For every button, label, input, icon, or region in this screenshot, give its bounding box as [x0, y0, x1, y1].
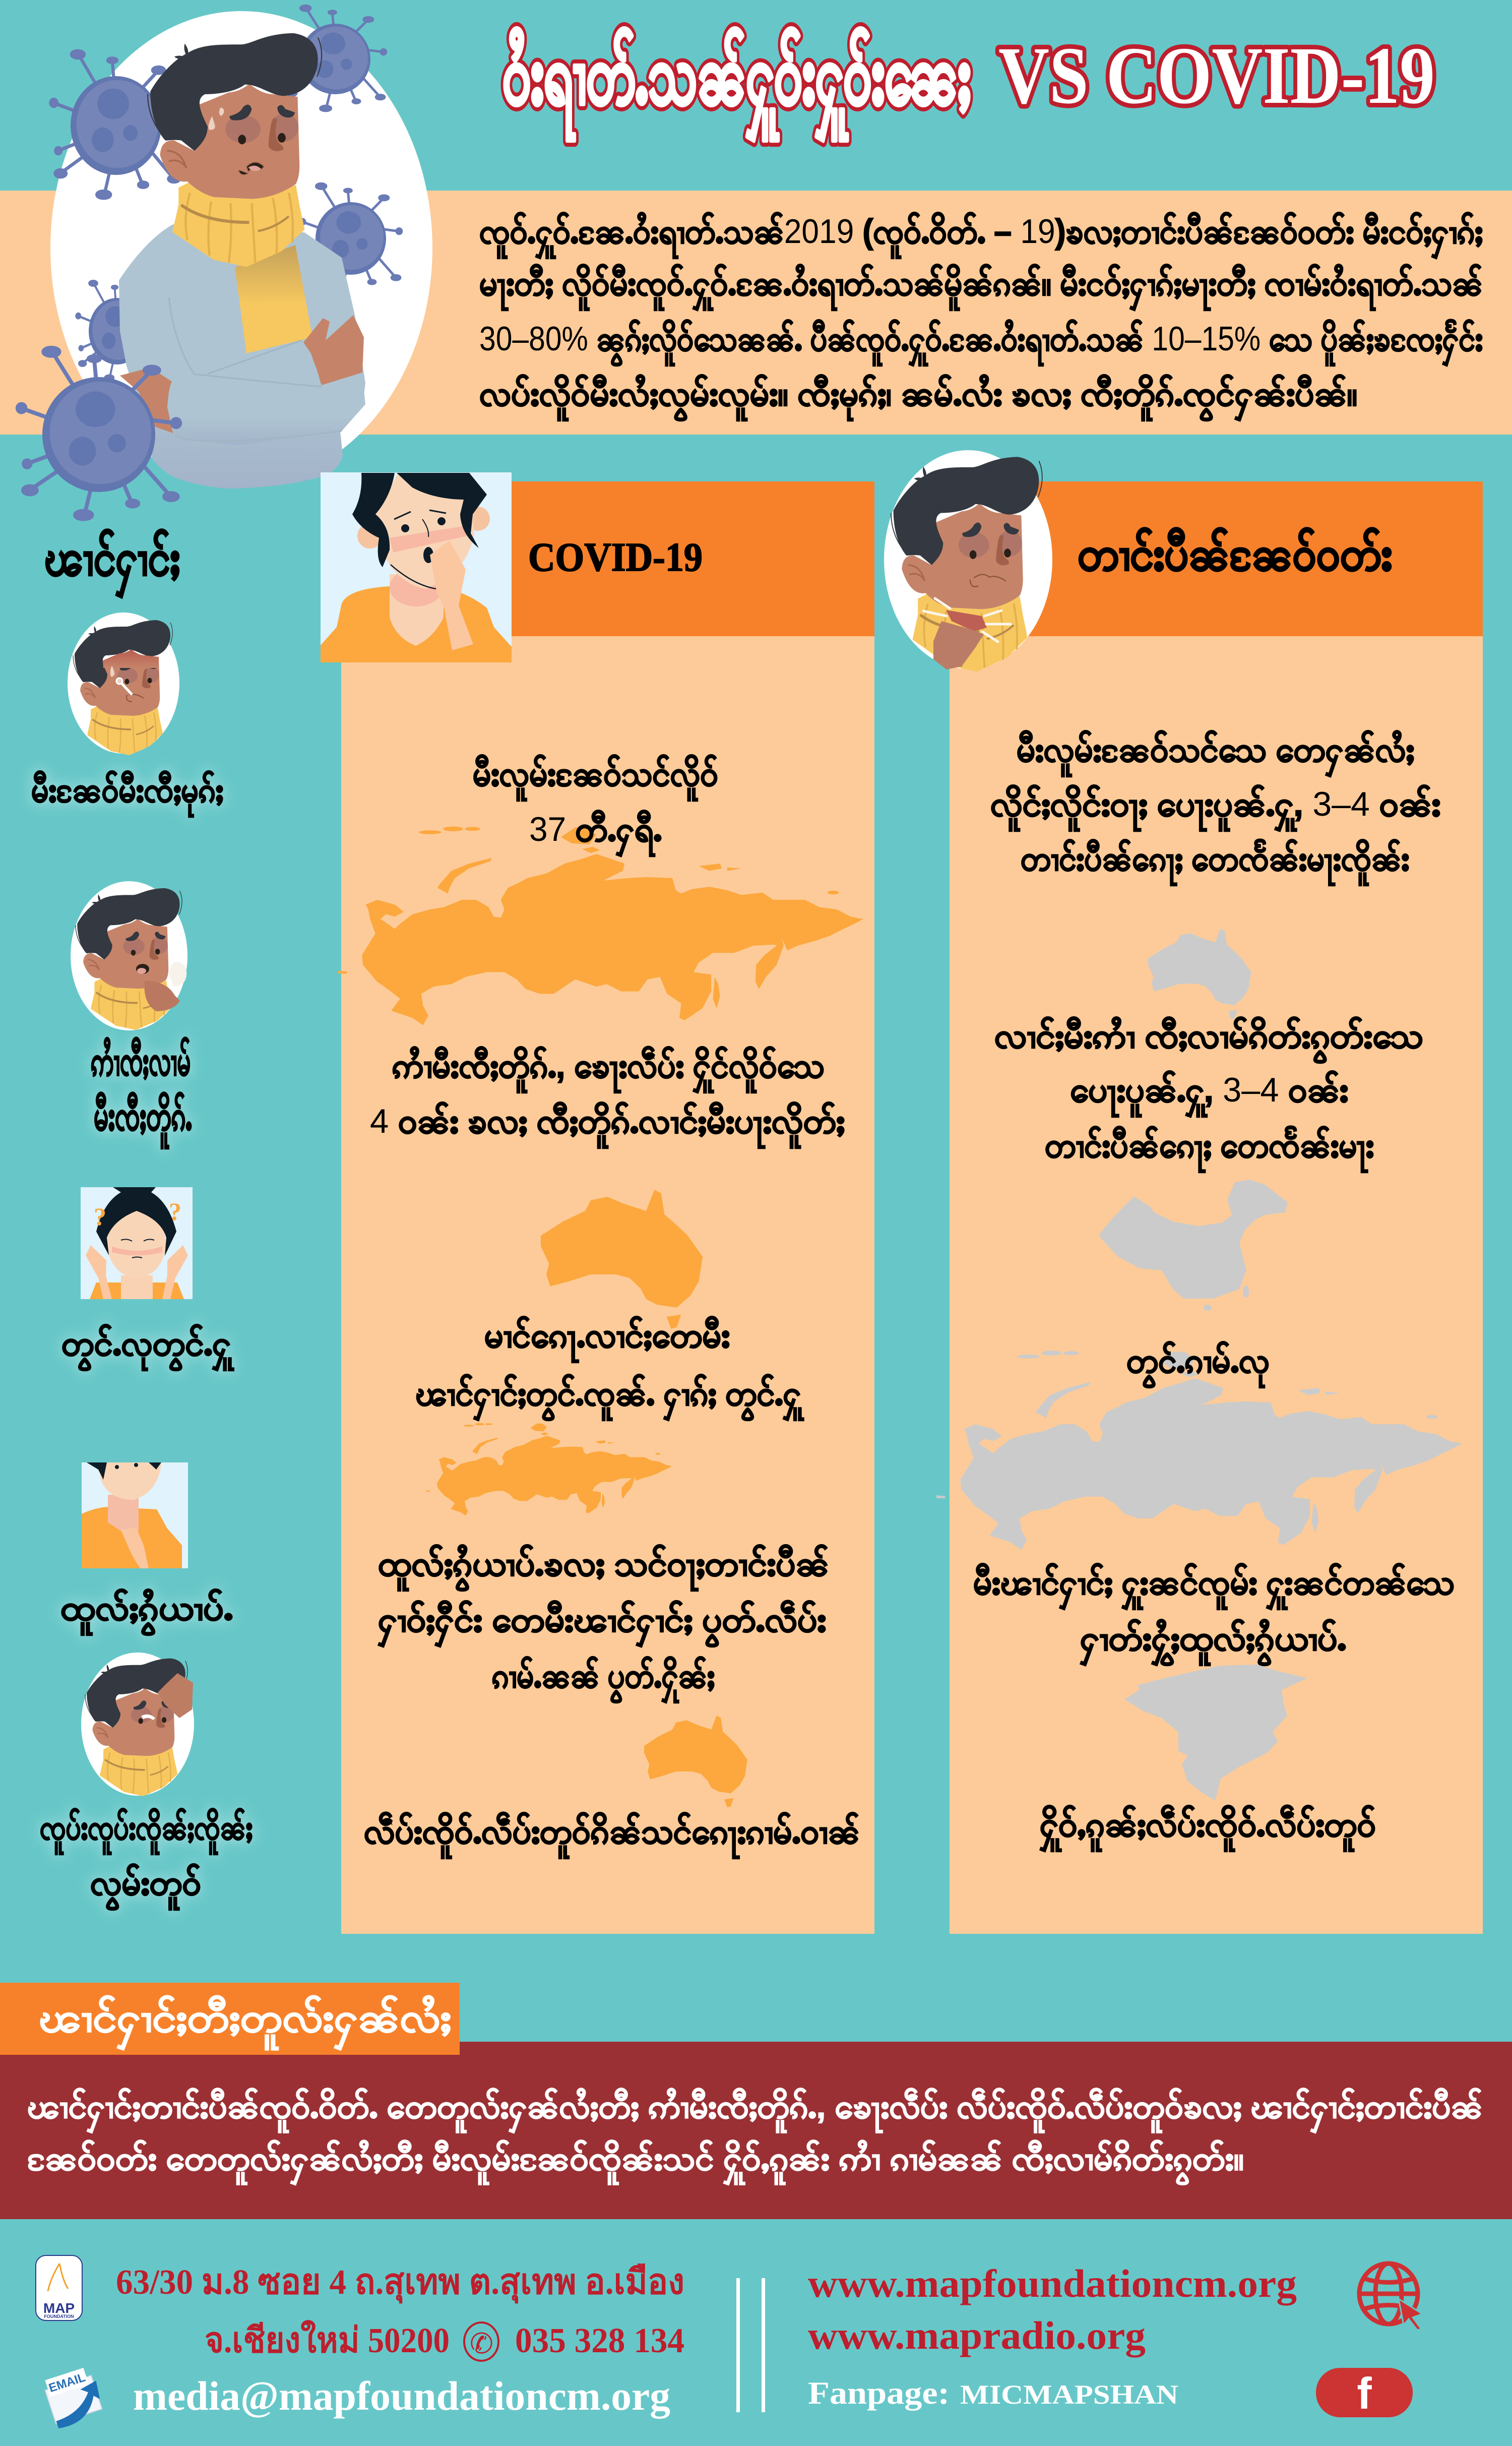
symptom: loss of smell: တွင်ႉလုတွင်ႉႁူ [61, 1324, 234, 1371]
footer: MAP logo [36, 2255, 82, 2320]
map: Russia [338, 826, 863, 1025]
intro text: 30–80% ၼွၵ်ႈလိူဝ်သေၼၼ်ႉ ပီၼ်ၸူဝ်ႉႁူဝ်ႉၼႄႉဝႆးရၢတ်ႉသၼ် 10–15% သေ ပိူၼ်ႈၶၸႄႈႁႅင်း [479, 319, 1483, 366]
footer: address [116, 2263, 684, 2361]
cough text: ပေႃးပူၼ်ႉႁူ, 3–4 ဝၼ်း [1070, 1070, 1348, 1118]
symptom: loss of smell: ? [94, 1202, 106, 1231]
panel: flu [884, 450, 1483, 1934]
icon: email: EMAIL [47, 2370, 87, 2395]
symptom: dry cough: ဢၢႆၸီႈလၢမ် [91, 1037, 191, 1084]
smell text: ၽၢင်ႁၢင်ႈတွင်ႉၸူၼ်ႉ ႁၢၵ်ႈ တွင်ႉႁူ [415, 1374, 804, 1421]
illustration: man with sore throat [884, 450, 1052, 671]
map: Russia small [426, 1423, 672, 1516]
cough text: ဢၢႆမီးၸီႈတိူၵ်ႉ, ၶေႃးလဵပ်း ႁိူင်လိူဝ်သေ [392, 1046, 825, 1093]
icon: globe cursor [1359, 2264, 1422, 2330]
title [502, 28, 1435, 141]
intro text [479, 212, 1483, 421]
fever text: တၢင်းပီၼ်ၵေႃႈ တေၸႅၼ်းမႃးၸိူၼ်း [1021, 838, 1409, 886]
footer: address: จ.เชียงใหม่ 50200 [205, 2319, 450, 2360]
illustration: sick man with viruses [18, 6, 432, 519]
panel: common symptoms [0, 1983, 1512, 2219]
COVID-19 heading: COVID-19 [528, 535, 703, 580]
body ache text: ႁိူဝ်ႇၵူၼ်ႈလဵပ်းၸိူဝ်ႉလဵပ်းတူဝ် [1040, 1805, 1376, 1852]
smell text: တွင်ႉၵၢမ်ႉလု [1126, 1341, 1270, 1388]
cough text: လၢင်ႈမီးဢၢႆ ၸီႈလၢမ်ၵိတ်းၵွတ်းသေ [994, 1016, 1423, 1064]
throat text: ထူလ်ႈၵွႆယၢပ်ႉၶလႈ သင်ဝႃႈတၢင်းပီၼ် [378, 1544, 829, 1592]
symptom: loss of smell: ? [169, 1197, 181, 1226]
throat text: ႁၢဝ်ႈႁီင်း တေမီးၽၢင်ႁၢင်ႈ ပွတ်ႉလဵပ်း [378, 1600, 826, 1647]
smell text: မၢင်ၵေႃႉလၢင်ႈတေမီး [484, 1316, 730, 1363]
cough text: 4 ဝၼ်း ၶလႈ ၸီႈတိူၵ်ႉလၢင်ႈမီးပႃးလိူတ်ႈ [370, 1102, 845, 1149]
symptom: loss of smell [61, 1187, 234, 1371]
footer: address: ✆ [470, 2328, 493, 2360]
footer: websites: www.mapradio.org [808, 2313, 1146, 2357]
cough text: တၢင်းပီၼ်ၵေႃႈ တေၸႅၼ်းမႃး [1045, 1125, 1374, 1173]
panel: COVID-19 [321, 472, 874, 1934]
map: Australia grey [1148, 929, 1251, 1019]
footer: websites: www.mapfoundationcm.org [808, 2261, 1297, 2305]
throat text: ၵၢမ်ႉၼၼ် ပွတ်ႉႁိုၼ်ႈ [492, 1656, 715, 1703]
cough text [994, 1016, 1423, 1173]
footer: address: 63/30 ม.8 ซอย 4 ถ.สุเทพ ต.สุเทพ อ.เมือง [116, 2263, 684, 2304]
fever text: 37 တီႉႁရီႉ [529, 810, 662, 857]
footer: websites: Fanpage: [808, 2375, 950, 2411]
divider [736, 2278, 765, 2412]
illustration: woman coughing [321, 472, 512, 662]
map: China grey [1099, 1180, 1288, 1311]
symptom: fever: မီးၼႄဝ်မီးၸီႈမုၵ်ႈ [31, 770, 223, 818]
footer: email address: media@mapfoundationcm.org [133, 2373, 670, 2419]
symptom: sore throat [60, 1462, 233, 1636]
flu heading: တၢင်းပီၼ်ၼႄဝ်ဝတ်း [1078, 528, 1392, 580]
fever text [990, 730, 1440, 886]
title: VS COVID-19 [998, 31, 1435, 121]
throat text [973, 1563, 1455, 1666]
map: Russia grey [936, 1351, 1462, 1550]
throat text: ႁၢတ်းႁွႆႈထူလ်ႈၵွႆယၢပ်ႉ [1080, 1619, 1346, 1666]
symptom: body ache and headache: ၸူပ်းၸူပ်းၸိူၼ်ႈၸိူၼ်ႈ [40, 1808, 253, 1855]
throat text [378, 1544, 829, 1703]
fever text: လိူင်ႈလိူင်းဝႃႈ ပေႃးပူၼ်ႉႁူ, 3–4 ဝၼ်း [990, 784, 1440, 832]
smell text [415, 1316, 804, 1421]
icon: email [42, 2365, 107, 2429]
symptom: body ache and headache: လွမ်းတူဝ် [90, 1863, 201, 1911]
symptom: fever [31, 613, 223, 818]
intro text: ၸူဝ်ႉႁူဝ်ႉၼႄႉဝႆးရၢတ်ႉသၼ်2019 (ၸူဝ်ႉဝိတ်ႉ – 19)ၶလႈတၢင်းပီၼ်ၼႄဝ်ဝတ်း မီးငဝ်ႈႁၢၵ်ႈ [479, 212, 1483, 259]
footer: MAP logo: FOUNDATION [44, 2314, 74, 2319]
intro band [0, 191, 1512, 435]
footer: MAP logo: MAP [43, 2300, 75, 2316]
footer: websites: MICMAPSHAN [960, 2379, 1178, 2410]
title: ဝႆးရၢတ်ႉသၼ်ႁူဝ်းႁူဝ်းၼေႈ [502, 28, 971, 141]
tab heading: ၽၢင်ႁၢင်ႈတီႈတူလ်းႁၼ်လႆႈ [39, 1995, 451, 2050]
common symptoms text: ၼႄဝ်ဝတ်း တေတူလ်းႁၼ်လႆႈတီႈ မီးလူမ်းၼႄဝ်ၸိူၼ်းသင် ႁိူဝ်ႇၵူၼ်း ဢၢႆ ၵၢမ်ၼၼ် ၸီႈလၢမ်ၵိတ်းၵွတ်း။ [27, 2139, 1244, 2185]
fever text: မီးလူမ်းၼႄဝ်သင်သေ တေႁၼ်လႆႈ [1017, 730, 1414, 777]
symptom: sore throat: ထူလ်ႈၵွႆယၢပ်ႉ [60, 1588, 233, 1636]
heading: symptoms: ၽၢင်ႁၢင်ႈ [44, 529, 180, 598]
symptom: dry cough: မီးၸီႈတိူၵ်ႉ [94, 1092, 192, 1149]
icon: facebook [1316, 2368, 1413, 2418]
common symptoms text: ၽၢင်ႁၢင်ႈတၢင်းပီၼ်ၸူဝ်ႉဝိတ်ႉ တေတူလ်းႁၼ်လႆႈတီႈ ဢၢႆမီးၸီႈတိူၵ်ႉ, ၶေႃးလဵပ်း လဵပ်းၸိူဝ်ႉလဵပ်းတူဝ်ၶလႈ ၽၢင်ႁၢင်ႈတၢင်းပီၼ် [27, 2087, 1483, 2133]
flu header [1028, 481, 1483, 636]
fever text: မီးလူမ်းၼႄဝ်သင်လိူဝ် [473, 754, 718, 802]
title: ဝႆးရၢတ်ႉသၼ်ႁူဝ်းႁူဝ်းၼေႈ [502, 28, 971, 141]
cough text [370, 1046, 845, 1149]
COVID-19 header [512, 481, 874, 636]
throat text: မီးၽၢင်ႁၢင်ႈ ႁူးၼင်ၸူမ်း ႁူးၼင်တၼ်သေ [973, 1563, 1455, 1610]
map: Greenland grey [1124, 1665, 1307, 1801]
map: Australia small [644, 1716, 747, 1807]
body ache text: လဵပ်းၸိူဝ်ႉလဵပ်းတူဝ်ၵိၼ်သင်ၵေႃးၵၢမ်ႉဝၢၼ် [364, 1812, 860, 1859]
footer: websites [808, 2261, 1297, 2411]
intro text: လပ်းလိူဝ်မီးလႆႈလွမ်းလူမ်း။ ၸီႈမုၵ်ႈ၊ ၼမ်ႉလႆး ၶလႈ ၸီႈတိူၵ်ႉၸွင်ႁၼ်းပီၼ်။ [479, 374, 1357, 421]
symptom: body ache and headache [40, 1653, 253, 1911]
symptom: dry cough [71, 881, 192, 1149]
footer: address: 035 328 134 [515, 2321, 684, 2360]
common symptoms text [27, 2087, 1483, 2185]
icon: facebook: f [1357, 2368, 1372, 2418]
tab [0, 1983, 460, 2055]
map: Australia [541, 1190, 703, 1329]
fever text [473, 754, 718, 857]
